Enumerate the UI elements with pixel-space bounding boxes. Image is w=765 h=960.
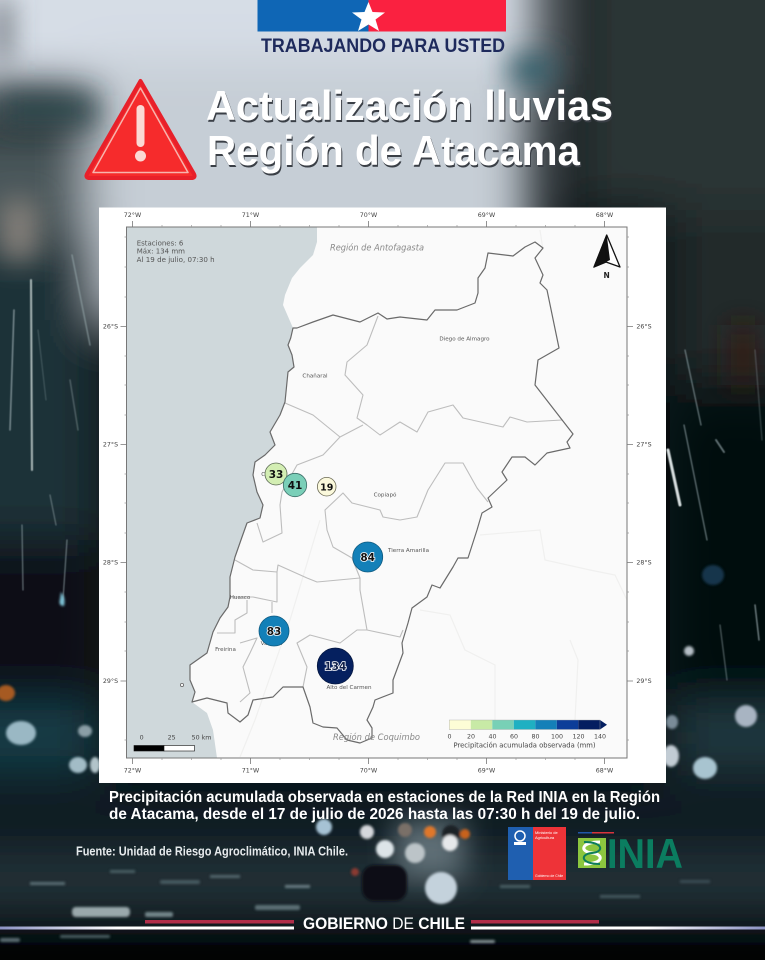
station marker: 83 mm bbox=[259, 616, 289, 646]
logo: INIA bbox=[578, 830, 683, 877]
icon: warning triangle bbox=[86, 81, 195, 178]
panel: map bbox=[99, 208, 666, 783]
longitude and latitude labels: 27°S bbox=[103, 440, 118, 448]
legend: precipitation colour bar: 100 bbox=[551, 734, 563, 740]
station marker: 41 mm bbox=[283, 473, 307, 497]
legend: precipitation colour bar: 40 bbox=[488, 734, 497, 740]
legend: precipitation colour bar: 20 bbox=[467, 734, 475, 740]
province labels: Tierra Amarilla bbox=[387, 548, 429, 554]
region labels: Región de Antofagasta bbox=[330, 242, 424, 254]
legend: precipitation colour bar bbox=[447, 720, 607, 750]
scale bar: 0 bbox=[140, 734, 144, 742]
footer: Gobierno de Chile bbox=[0, 914, 765, 933]
station marker: 84 mm: 84 bbox=[360, 552, 375, 564]
scale bar bbox=[134, 734, 211, 751]
station marker: 19 mm: 19 bbox=[320, 482, 333, 494]
station marker: 19 mm bbox=[317, 477, 336, 496]
region outline bbox=[190, 242, 573, 743]
caption: Precipitación acumulada observada en estaciones de la Red INIA en la Región bbox=[109, 789, 660, 806]
longitude and latitude labels: 28°S bbox=[636, 558, 652, 566]
longitude and latitude labels: 72°W bbox=[124, 766, 142, 774]
station marker: 134 mm: 134 bbox=[324, 661, 346, 673]
longitude and latitude labels: 71°W bbox=[242, 766, 260, 774]
station marker: 41 mm: 41 bbox=[288, 480, 302, 492]
title: Región de Atacama bbox=[207, 127, 581, 174]
scale bar: 25 bbox=[168, 734, 176, 742]
longitude and latitude labels: 68°W bbox=[596, 211, 614, 219]
longitude and latitude labels: 29°S bbox=[636, 677, 652, 685]
province labels: Diego de Almagro bbox=[439, 336, 490, 342]
logo: Ministerio de Agricultura: Gobierno de Chile bbox=[535, 874, 563, 878]
land bbox=[190, 227, 627, 758]
legend: precipitation colour bar: 60 bbox=[510, 734, 518, 740]
longitude and latitude labels: 68°W bbox=[596, 766, 614, 774]
region labels: Región de Coquimbo bbox=[333, 732, 420, 743]
longitude and latitude labels: 26°S bbox=[636, 322, 652, 330]
scale bar: 50 km bbox=[192, 734, 211, 742]
map info text bbox=[137, 240, 215, 264]
province labels: Caldera bbox=[261, 472, 283, 478]
caption bbox=[109, 789, 660, 823]
longitude and latitude labels: 27°S bbox=[636, 440, 652, 448]
longitude and latitude labels: 70°W bbox=[360, 766, 378, 774]
legend: precipitation colour bar: Precipitación acumulada observada (mm) bbox=[454, 742, 596, 750]
longitude and latitude labels: 29°S bbox=[103, 677, 118, 685]
faint neighbouring boundaries bbox=[240, 230, 627, 757]
north arrow: N bbox=[604, 271, 610, 280]
map info text: Estaciones: 6 bbox=[137, 240, 184, 248]
longitude and latitude labels: 26°S bbox=[103, 322, 118, 330]
longitude and latitude labels: 69°W bbox=[478, 766, 496, 774]
province labels: Freirina bbox=[215, 647, 236, 653]
logo: Ministerio de Agricultura: Agricultura bbox=[535, 835, 555, 840]
province labels: Chañaral bbox=[302, 374, 328, 380]
longitude and latitude labels: 72°W bbox=[124, 211, 142, 219]
station marker: 33 mm bbox=[265, 463, 287, 485]
map sea background bbox=[126, 227, 627, 758]
map frame and ticks bbox=[120, 221, 633, 764]
logo: Ministerio de Agricultura bbox=[508, 827, 566, 880]
provincial boundaries bbox=[217, 316, 562, 702]
legend: precipitation colour bar: 140 bbox=[594, 734, 606, 740]
station marker: 84 mm bbox=[353, 542, 383, 572]
logo: Ministerio de Agricultura: Ministerio de bbox=[535, 830, 558, 835]
footer: Gobierno de Chile: GOBIERNO DE CHILE bbox=[303, 914, 465, 933]
source note: Fuente: Unidad de Riesgo Agroclimático, INIA Chile. bbox=[76, 844, 348, 858]
north arrow bbox=[594, 235, 620, 280]
legend: precipitation colour bar: 120 bbox=[572, 734, 585, 740]
region labels bbox=[330, 242, 424, 743]
station marker: 83 mm: 83 bbox=[267, 626, 281, 638]
header logo: Trabajando para usted bbox=[258, 0, 506, 57]
map info text: Al 19 de julio, 07:30 h bbox=[137, 256, 215, 264]
province labels: Vallenar bbox=[261, 641, 284, 647]
title: Actualización lluvias bbox=[206, 82, 613, 129]
logo: INIA: INIA bbox=[607, 830, 683, 877]
longitude and latitude labels bbox=[103, 211, 652, 774]
caption: de Atacama, desde el 17 de julio de 2026 hasta las 07:30 h del 19 de julio. bbox=[109, 806, 640, 823]
province labels: Copiapó bbox=[374, 492, 397, 498]
province labels bbox=[215, 336, 490, 691]
station marker: 33 mm: 33 bbox=[269, 469, 283, 481]
province labels: Alto del Carmen bbox=[326, 685, 372, 691]
map info text: Máx: 134 mm bbox=[137, 248, 185, 256]
longitude and latitude labels: 28°S bbox=[103, 558, 118, 566]
longitude and latitude labels: 71°W bbox=[242, 211, 260, 219]
legend: precipitation colour bar: 80 bbox=[531, 734, 540, 740]
longitude and latitude labels: 69°W bbox=[478, 211, 496, 219]
province labels: Huasco bbox=[230, 595, 251, 601]
longitude and latitude labels: 70°W bbox=[360, 211, 378, 219]
station marker: 134 mm bbox=[317, 648, 353, 684]
legend: precipitation colour bar: 0 bbox=[447, 734, 452, 740]
header logo: Trabajando para usted: TRABAJANDO PARA USTED bbox=[261, 35, 505, 57]
title bbox=[206, 82, 613, 174]
